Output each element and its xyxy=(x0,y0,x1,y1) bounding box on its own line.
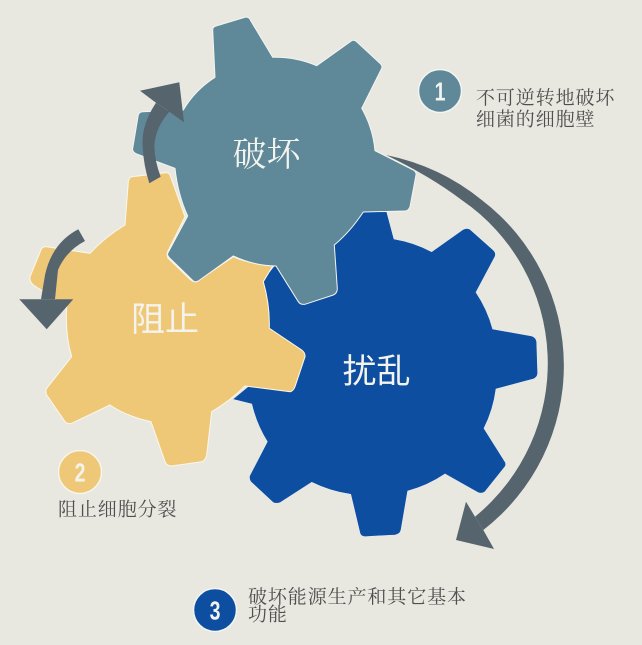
badge: number 3 xyxy=(194,588,236,632)
text: item 3 description: 破坏能源生产和其它基本 xyxy=(248,586,467,608)
arrow: upward curved arrow between yellow and teal gears xyxy=(140,82,184,183)
gear label: 破坏: 破坏 xyxy=(232,136,301,174)
gear label: 阻止: 阻止 xyxy=(131,301,199,339)
arrow: large clockwise arrow around blue gear xyxy=(386,155,564,549)
text: item 3 description: 功能 xyxy=(248,604,288,626)
gear: teal xyxy=(133,17,416,304)
badge: number 1: 1 xyxy=(435,77,446,106)
text: item 2 description: 阻止细胞分裂 xyxy=(58,498,177,520)
badge: number 2 xyxy=(58,450,102,494)
text: item 1 description: 细菌的细胞壁 xyxy=(476,108,595,130)
badge: number 1 xyxy=(418,70,462,112)
gear: blue xyxy=(233,212,538,537)
arrow: downward curved arrow on yellow gear xyxy=(19,229,85,329)
gear: yellow xyxy=(30,173,305,466)
gear label: 扰乱: 扰乱 xyxy=(342,353,410,391)
badge: number 3: 3 xyxy=(210,596,220,625)
badge: number 2: 2 xyxy=(75,458,85,487)
text: item 1 description: 不可逆转地破坏 xyxy=(476,87,615,109)
